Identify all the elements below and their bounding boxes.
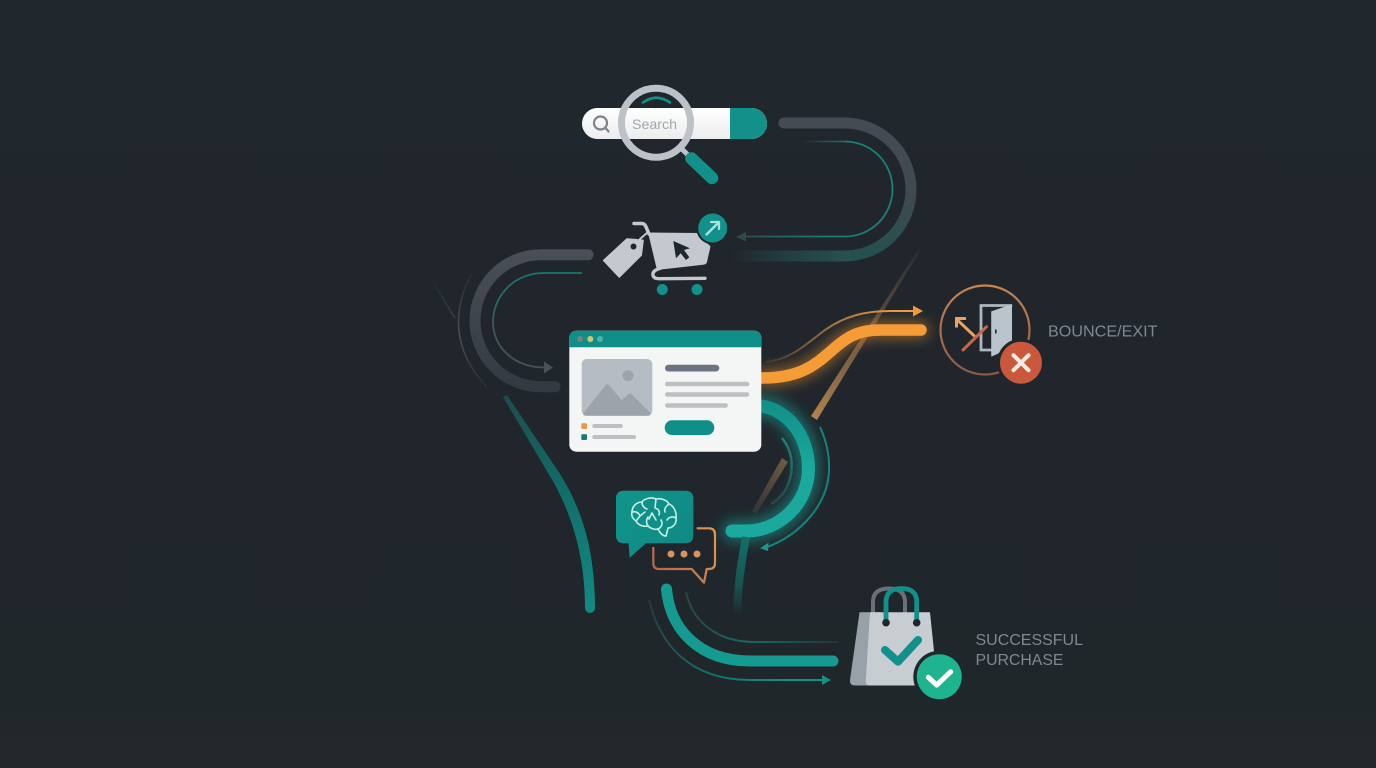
icon: shopping bag with check: [850, 588, 965, 703]
legend bullets: [581, 423, 636, 440]
orange chat bubble: [653, 528, 715, 583]
label: successful purchase: SUCCESSFUL: [976, 632, 1083, 649]
door panel: [992, 305, 1012, 356]
icon: chat bubbles with brain: [616, 491, 715, 583]
label: successful purchase: PURCHASE: [976, 652, 1064, 669]
connector: long teal tapered line: [503, 395, 595, 613]
cart wheels: [657, 284, 668, 295]
orange bounce path with glow: [762, 330, 921, 378]
search placeholder text: Search: [632, 116, 677, 132]
teal chat bubble: [616, 491, 693, 558]
connector: faint outer curve: [430, 273, 487, 387]
product page window: [569, 331, 761, 452]
connector: diagonal brown line: [752, 250, 920, 514]
connector: teal purchase path: [666, 589, 833, 661]
front handle: [886, 588, 917, 622]
bag front panel: [866, 612, 937, 686]
icon: small search glyph: [594, 116, 608, 132]
price tag: [604, 239, 643, 277]
bag check mark: [885, 640, 918, 662]
cart basket: [648, 232, 710, 270]
connector: outer thin teal arrow: [649, 600, 831, 685]
label: successful purchase: [976, 632, 1083, 669]
icon: exit door in circle: [940, 286, 1045, 387]
cursor: [673, 241, 690, 260]
icon: shopping cart with price tag: [604, 212, 729, 295]
connector: cart to page, thick gray path: [475, 255, 588, 387]
bag back panel: [850, 612, 880, 686]
slash: [963, 327, 986, 350]
back handle: [873, 588, 905, 613]
red cross badge: [997, 339, 1045, 387]
image placeholder: [582, 359, 652, 416]
thin orange arrow: [765, 306, 923, 362]
teal conversion arc with glow: [732, 406, 808, 531]
fading vertical teal line: [737, 537, 746, 615]
call to action button: [665, 420, 714, 435]
thin teal arrow on arc: [760, 427, 829, 551]
connector: inner thin teal line: [686, 592, 838, 642]
cart handle and rail: [634, 224, 705, 279]
green check badge: [913, 651, 965, 703]
door frame: [981, 306, 1011, 350]
inner thin teal curve: [771, 438, 792, 504]
exit arrow: [958, 320, 974, 336]
product text lines: [665, 365, 749, 408]
label: bounce exit: BOUNCE/EXIT: [1048, 324, 1158, 341]
connector: search to cart, thick gray path: [737, 123, 911, 256]
connector: cart to page, thin arrow: [493, 273, 582, 374]
connector: search to cart, thin teal arrow: [736, 142, 893, 242]
search bar: [582, 108, 767, 139]
brain glyph: [632, 498, 676, 536]
icon: magnifying glass: [622, 88, 712, 178]
teal arrow badge: [696, 212, 729, 244]
window title bar: [569, 331, 761, 347]
